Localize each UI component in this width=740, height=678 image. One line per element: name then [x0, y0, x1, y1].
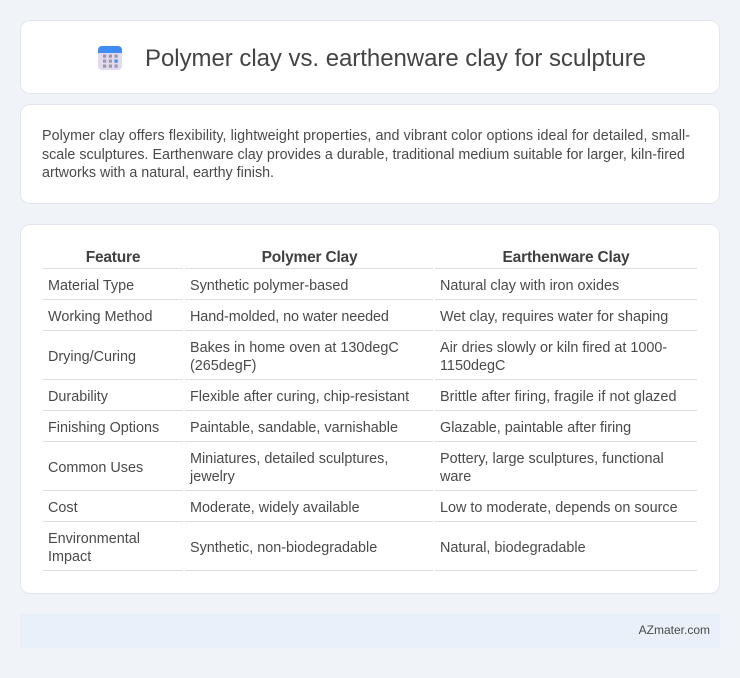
comparison table panel	[20, 224, 720, 594]
comparison table: Bakes in home oven at 130degC	[190, 340, 399, 356]
row: cost	[48, 500, 678, 516]
comparison table: Earthenware Clay	[503, 249, 629, 266]
comparison table: Polymer Clay	[262, 249, 357, 266]
intro text panel	[20, 104, 720, 204]
comparison table: Low to moderate, depends on source	[440, 500, 678, 516]
icon: calendar	[98, 46, 122, 70]
comparison table: Synthetic polymer-based	[190, 278, 348, 294]
comparison table: Feature	[86, 249, 140, 266]
comparison table: Common Uses	[48, 460, 143, 476]
comparison table: Working Method	[48, 309, 153, 325]
comparison table: Environmental	[48, 531, 140, 547]
header panel	[20, 20, 720, 94]
title: Polymer clay vs. earthenware clay for sculpture	[145, 45, 646, 72]
row: material type	[48, 278, 619, 294]
comparison table: 1150degC	[440, 358, 505, 374]
comparison table: Impact	[48, 549, 91, 565]
comparison table: ware	[440, 469, 471, 485]
comparison table: Air dries slowly or kiln fired at 1000-	[440, 340, 667, 356]
comparison table: Finishing Options	[48, 420, 159, 436]
comparison table: Flexible after curing, chip-resistant	[190, 389, 409, 405]
row: finishing options	[48, 420, 631, 436]
column headers	[86, 249, 630, 266]
intro text	[42, 128, 690, 181]
comparison table: jewelry	[190, 469, 235, 485]
comparison table: Moderate, widely available	[190, 500, 360, 516]
comparison table: Wet clay, requires water for shaping	[440, 309, 668, 325]
row: durability	[48, 389, 677, 405]
comparison table: Pottery, large sculptures, functional	[440, 451, 664, 467]
footer source text: AZmater.com	[639, 623, 710, 637]
row: common uses	[48, 451, 664, 485]
row: working method	[48, 309, 668, 325]
comparison table: Glazable, paintable after firing	[440, 420, 631, 436]
comparison table: Paintable, sandable, varnishable	[190, 420, 398, 436]
footer bar	[20, 614, 720, 648]
intro text: scale sculptures. Earthenware clay provides a durable, traditional medium suitable for larger, kiln-fired	[42, 147, 685, 163]
comparison table: Drying/Curing	[48, 349, 136, 365]
row: environmental impact	[48, 531, 586, 565]
comparison table: Material Type	[48, 278, 134, 294]
comparison table: Miniatures, detailed sculptures,	[190, 451, 388, 467]
comparison table: Durability	[48, 389, 108, 405]
comparison table: Synthetic, non-biodegradable	[190, 540, 377, 556]
comparison table: Natural clay with iron oxides	[440, 278, 619, 294]
comparison table: Cost	[48, 500, 78, 516]
intro text: artworks with a natural, earthy finish.	[42, 165, 274, 181]
comparison table: Brittle after firing, fragile if not glazed	[440, 389, 677, 405]
intro text: Polymer clay offers flexibility, lightweight properties, and vibrant color options ideal for detailed, small-	[42, 128, 690, 144]
comparison table: (265degF)	[190, 358, 256, 374]
comparison table: Hand-molded, no water needed	[190, 309, 389, 325]
row: drying/curing	[48, 340, 667, 374]
comparison table: Natural, biodegradable	[440, 540, 586, 556]
